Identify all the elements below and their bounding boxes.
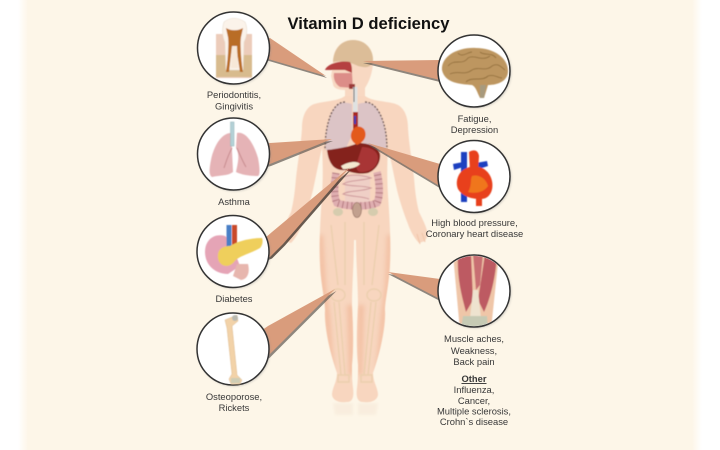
circle: muscle [438, 254, 511, 328]
head [331, 40, 373, 96]
label: other conditions: Other [461, 373, 487, 384]
label: fatigue: Fatigue, [458, 113, 491, 124]
label: other conditions: Influenza, [454, 384, 494, 395]
label: asthma: Asthma [218, 196, 251, 207]
right hand fingers [417, 233, 425, 244]
circle: pancreas [197, 216, 270, 288]
heart [351, 126, 366, 145]
lungs [326, 103, 352, 150]
label: periodontitis: Periodontitis, [207, 89, 261, 100]
circle: brain [438, 35, 511, 108]
label: high blood pressure: High blood pressure, [431, 217, 518, 228]
body silhouette [287, 96, 428, 402]
circle: bone [197, 313, 270, 386]
wedge: tooth to mouth [255, 38, 327, 78]
rib edges [325, 102, 387, 150]
skin shading [318, 235, 392, 375]
wedge: heart [368, 143, 452, 194]
appendix shape [352, 202, 362, 218]
label: osteoporose: Rickets [219, 402, 250, 413]
title: Vitamin D deficiency [288, 14, 450, 33]
trachea and aorta [353, 87, 358, 113]
wedge: muscle [388, 272, 452, 307]
label: muscle aches: Muscle aches, [444, 333, 504, 344]
brain area [333, 40, 373, 67]
label: periodontitis: Gingivitis [215, 100, 253, 112]
label: osteoporose: Osteoporose, [206, 391, 262, 402]
intestines [335, 172, 379, 206]
wedge: brain [363, 60, 452, 86]
label: fatigue: Depression [451, 124, 498, 135]
circle: lungs [198, 118, 270, 191]
label: other conditions: Cancer, [458, 395, 490, 406]
liver and stomach [327, 143, 380, 174]
human body figure [287, 40, 428, 414]
circle: heart [438, 140, 511, 214]
wedge: pancreas [258, 167, 352, 264]
mouth and throat [334, 73, 353, 88]
label: other conditions [437, 373, 511, 427]
label: muscle aches: Weakness, [451, 345, 497, 356]
label: diabetes: Diabetes [215, 293, 253, 304]
circle: tooth [198, 12, 270, 85]
nasal cavity [325, 61, 352, 73]
label: high blood pressure: Coronary heart disease [426, 228, 523, 239]
wedge: lungs [255, 139, 333, 170]
foot reflection [333, 403, 378, 415]
pelvis and leg bones [331, 222, 381, 382]
wedge: bone [255, 289, 336, 362]
label: other conditions: Multiple sclerosis, [437, 406, 511, 416]
label: other conditions: Crohn`s disease [440, 416, 508, 427]
label: muscle aches: Back pain [453, 356, 495, 367]
